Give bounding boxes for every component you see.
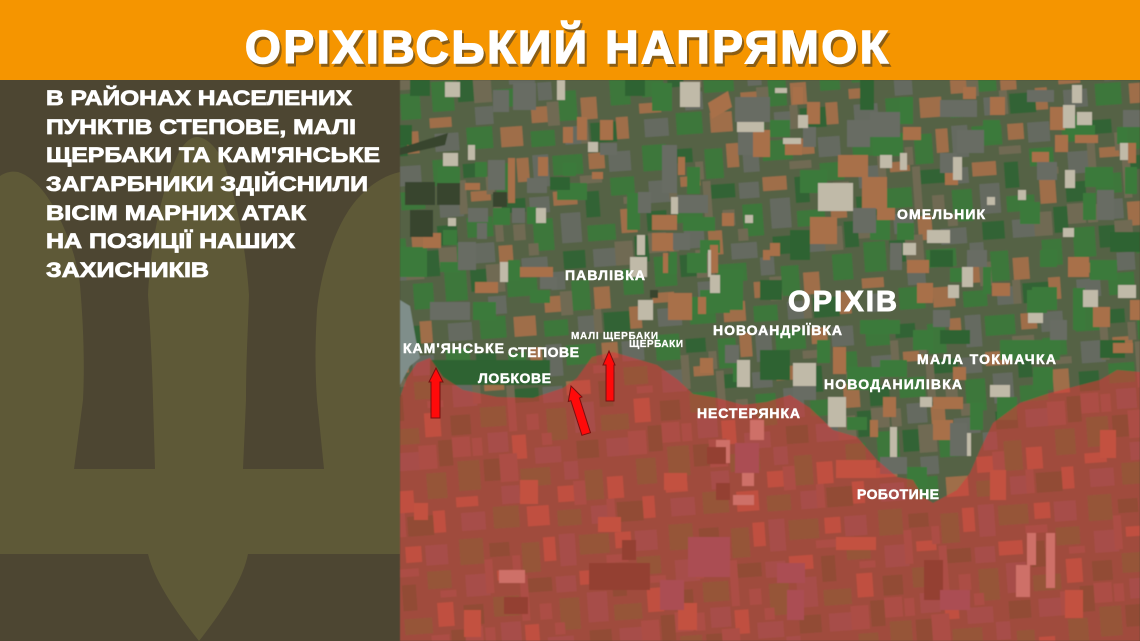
label: Kamianske: КАМ'ЯНСЬКЕ	[403, 340, 504, 356]
arrow: attack near Kamianske	[429, 368, 443, 418]
body text block: В РАЙОНАХ НАСЕЛЕНИХ	[46, 86, 352, 110]
label: Nesterianka: НЕСТЕРЯНКА	[697, 405, 800, 421]
reservoir at Kamianske	[400, 300, 420, 385]
label: Mali Shcherbaky: МАЛІ ЩЕРБАКИ	[571, 331, 658, 342]
body text block: ПУНКТІВ СТЕПОВЕ, МАЛІ	[46, 116, 356, 139]
body text block: НА ПОЗИЦІЇ НАШИХ	[46, 230, 295, 253]
body text block	[46, 86, 380, 282]
body text block: ЗАГАРБНИКИ ЗДІЙСНИЛИ	[46, 172, 368, 196]
map labels	[403, 206, 1056, 502]
label: Lobkove: ЛОБКОВЕ	[478, 370, 551, 386]
body text block: ЩЕРБАКИ ТА КАМ'ЯНСЬКЕ	[46, 144, 380, 167]
label: Omelnyk: ОМЕЛЬНИК	[897, 206, 985, 222]
map field patches	[400, 80, 1140, 637]
satellite map	[400, 80, 1140, 641]
trident emblem watermark	[0, 137, 400, 641]
occupied territory red overlay	[400, 352, 1140, 641]
label: Robotyne: РОБОТИНЕ	[857, 486, 939, 502]
arrow: attack near Lobkove	[568, 386, 590, 435]
label: Stepove: СТЕПОВЕ	[508, 344, 579, 360]
label: Pavlivka: ПАВЛІВКА	[565, 267, 645, 283]
label: Mala Tokmachka: МАЛА ТОКМАЧКА	[917, 351, 1056, 367]
title: ОРІХІВСЬКИЙ НАПРЯМОК	[245, 21, 889, 73]
label: Novoandriivka: НОВОАНДРІЇВКА	[713, 322, 842, 338]
label: Shcherbaky: ЩЕРБАКИ	[629, 339, 683, 350]
title band	[0, 0, 1140, 80]
arrow: attack near Mali Shcherbaky	[603, 351, 615, 401]
left panel with trident watermark	[0, 80, 400, 641]
body text block: ВІСІМ МАРНИХ АТАК	[46, 202, 306, 225]
body text block: ЗАХИСНИКІВ	[46, 259, 209, 282]
label: Orikhiv: ОРІХІВ	[788, 286, 897, 318]
label: Novodanylivka: НОВОДАНИЛІВКА	[824, 376, 962, 392]
